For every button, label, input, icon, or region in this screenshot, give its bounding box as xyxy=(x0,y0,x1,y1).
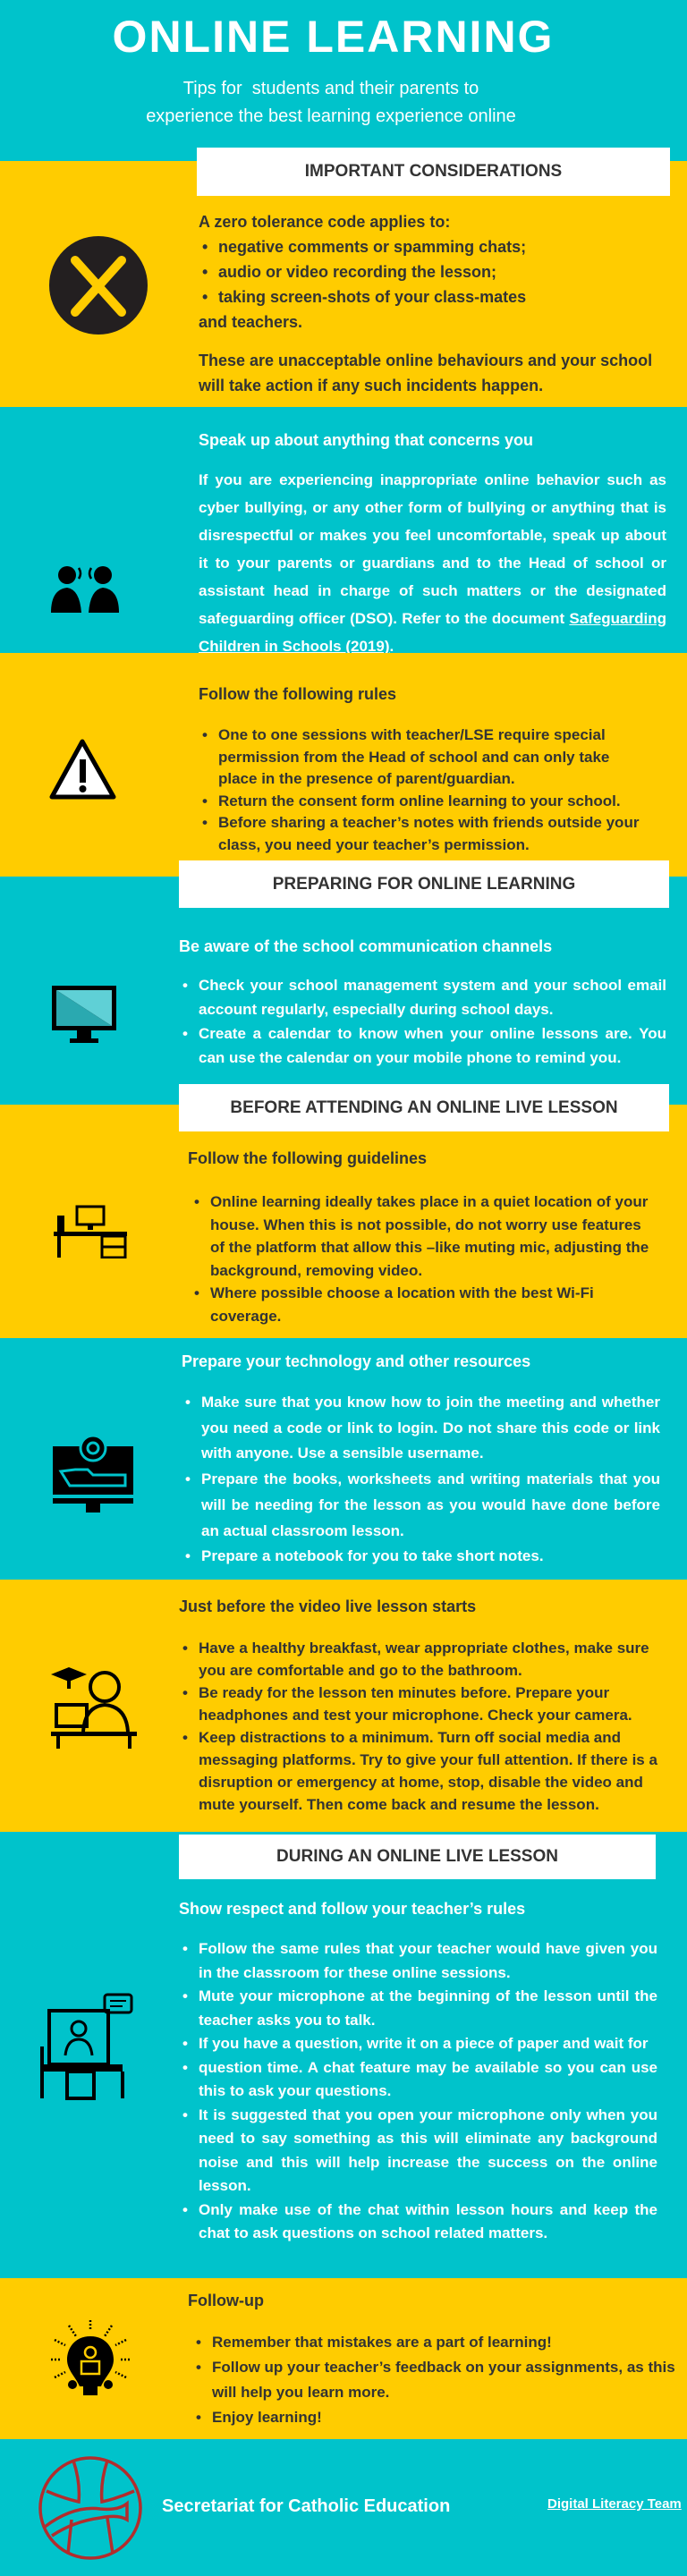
list: rules: Before sharing a teacher’s notes with friends outside your class, you need your teacher’s permission. xyxy=(218,814,639,853)
list xyxy=(186,1394,660,1564)
list xyxy=(195,1193,649,1324)
panel: just before xyxy=(0,1580,687,1832)
list: Keep distractions to a minimum. Turn off social media and messaging platforms. Try to give your full attention. If there is a disruption or emergency at home, stop, disable the video and mute yourself. Then come back and resume the lesson. xyxy=(199,1729,657,1813)
list: rules xyxy=(202,726,639,853)
icon: teacher at computer xyxy=(40,1993,132,2100)
subtitle: experience the best learning experience online xyxy=(146,106,516,126)
heading box: important considerations: IMPORTANT CONSIDERATIONS xyxy=(305,162,562,181)
list xyxy=(182,1640,658,1813)
list xyxy=(197,2334,675,2426)
list: Enjoy learning! xyxy=(212,2409,322,2426)
heading: Follow-up xyxy=(188,2292,264,2309)
text: zero tolerance: A zero tolerance code applies to: and teachers. These are unacceptable online behaviours and your school will take action if any such incidents happen. xyxy=(199,213,652,394)
heading box: preparing xyxy=(179,860,669,908)
heading: Be aware of the school communication channels xyxy=(179,937,552,955)
icon: light bulb xyxy=(51,2320,130,2395)
panel: prepare technology xyxy=(0,1338,687,1580)
list xyxy=(182,977,666,1066)
header xyxy=(0,0,687,161)
heading box: during xyxy=(179,1835,656,1879)
text: zero tolerance: audio or video recording the lesson; xyxy=(218,263,496,281)
footer text: Secretariat for Catholic Education xyxy=(162,2496,450,2516)
list: rules: Return the consent form online learning to your school. xyxy=(218,792,621,809)
panel: before attending xyxy=(0,1105,687,1338)
list: rules: One to one sessions with teacher/LSE require special permission from the Head of school and can only take place in the presence of parent/guardian. xyxy=(218,726,609,787)
heading: Show respect and follow your teacher’s rules xyxy=(179,1900,525,1918)
list: Follow the same rules that your teacher would have given you in the classroom for these online sessions. xyxy=(199,1940,657,1980)
list: Be ready for the lesson ten minutes before. Prepare your headphones and test your microphone. Check your camera. xyxy=(199,1684,632,1724)
list: Prepare a notebook for you to take short notes. xyxy=(201,1547,544,1564)
panel: preparing xyxy=(0,877,687,1105)
subtitle xyxy=(146,79,516,126)
title: ONLINE LEARNING xyxy=(113,12,554,62)
heading box: before attending: BEFORE ATTENDING AN ONLINE LIVE LESSON xyxy=(230,1098,618,1116)
icon: desk xyxy=(54,1206,127,1258)
panel: follow rules xyxy=(0,653,687,877)
heading: Follow the following rules xyxy=(199,685,396,703)
list: If you have a question, write it on a piece of paper and wait for xyxy=(199,2035,649,2052)
icon: warning xyxy=(50,739,116,800)
list: Prepare the books, worksheets and writing materials that you will be needing for the lesson as you would have done before an actual classroom lesson. xyxy=(201,1470,660,1539)
list: question time. A chat feature may be available so you can use this to ask your questions. xyxy=(199,2059,657,2099)
list xyxy=(182,1940,657,2241)
heading: Prepare your technology and other resources xyxy=(182,1352,530,1370)
footer link: Digital Literacy Team xyxy=(547,2496,682,2512)
text: zero tolerance: taking screen-shots of your class-mates xyxy=(218,288,526,306)
subtitle: Tips for students and their parents to xyxy=(183,79,479,98)
heading box: during: DURING AN ONLINE LIVE LESSON xyxy=(276,1847,558,1866)
panel: follow-up xyxy=(0,2278,687,2439)
list: Only make use of the chat within lesson hours and keep the chat to ask questions on school related matters. xyxy=(199,2200,657,2241)
icon: two heads xyxy=(51,566,119,613)
list: Remember that mistakes are a part of learning! xyxy=(212,2334,552,2351)
list: Online learning ideally takes place in a quiet location of your house. When this is not possible, do not worry use features of the platform that allow this –like muting mic, adjusting the background, removing video. xyxy=(210,1193,649,1279)
panel: speak up xyxy=(0,407,687,653)
list: Check your school management system and your school email account regularly, especially during school days. xyxy=(199,977,666,1018)
icon: monitor xyxy=(52,986,116,1043)
list: It is suggested that you open your microphone only when you need to say something as this will eliminate any background noise and this will help increase the success on the online lesson. xyxy=(199,2106,657,2194)
list: Create a calendar to know when your online lessons are. You can use the calendar on your mobile phone to remind you. xyxy=(199,1025,666,1066)
icon: student with laptop xyxy=(51,1667,137,1749)
list: Follow up your teacher’s feedback on your assignments, as this will help you learn more. xyxy=(212,2359,675,2401)
heading box: preparing: PREPARING FOR ONLINE LEARNING xyxy=(273,875,575,893)
text: zero tolerance: negative comments or spamming chats; xyxy=(218,238,526,256)
text: speak up body: If you are experiencing inappropriate online behavior such as cyber bullying, or any other form of bullying or anything that is disrespectful or makes you feel uncomfortable, speak up about it to your parents or guardians and to the Head of school or assistant head in charge of such matters or the designated safeguarding officer (DSO). Refer to the document Safeguarding Children in Schools (2019). xyxy=(199,471,666,655)
list: Where possible choose a location with the best Wi-Fi coverage. xyxy=(210,1284,594,1324)
logo xyxy=(38,2456,142,2560)
heading: Follow the following guidelines xyxy=(188,1149,427,1167)
icon: monitor with gear and hand xyxy=(53,1436,133,1513)
list: Have a healthy breakfast, wear appropriate clothes, make sure you are comfortable and go to the bathroom. xyxy=(199,1640,649,1679)
heading box: important considerations xyxy=(197,148,670,196)
panel: important considerations xyxy=(0,161,687,407)
heading: Speak up about anything that concerns you xyxy=(199,431,533,449)
list: Make sure that you know how to join the meeting and whether you need a code or link to login. Do not share this code or link with anyone. Use a sensible username. xyxy=(201,1394,660,1462)
footer xyxy=(0,2439,687,2576)
list: Mute your microphone at the beginning of the lesson until the teacher asks you to talk. xyxy=(199,1987,657,2029)
heading: Just before the video live lesson starts xyxy=(179,1597,476,1615)
icon: x circle xyxy=(49,236,148,335)
panel: during xyxy=(0,1832,687,2279)
heading box: before attending xyxy=(179,1084,669,1131)
